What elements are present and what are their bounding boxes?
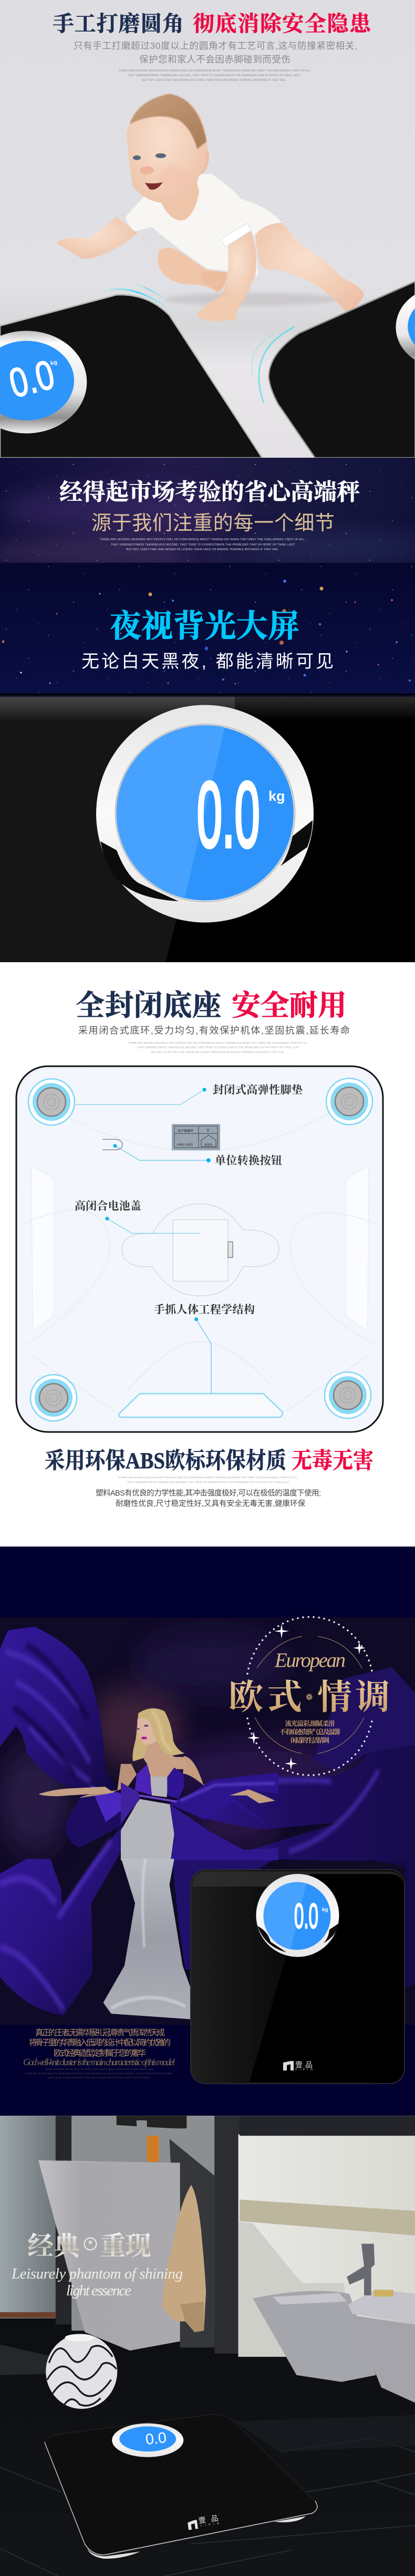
text block: English caption: BUT NOT LEAST,THEY ARE AFRAID OF LOSING THEIR FACE OR MAKING TERRIBLE MISTAKES IF THEY FAIL.	[142, 79, 286, 82]
icon: blue lcd screen	[105, 720, 295, 906]
icon: product nameplate: 电子健康秤	[178, 1129, 193, 1133]
logo: YIPIN on angled scale: 壹品	[198, 2513, 219, 2525]
icon: product nameplate: 正	[206, 1129, 210, 1132]
text block: script tagline: light essence	[66, 2282, 131, 2299]
text block: script tagline: Leisurely phantom of shining	[11, 2265, 183, 2282]
text block: noble statement: 欧式经典造型,定制属于您的奢华	[54, 2048, 146, 2058]
sub: extended arms	[79, 1764, 137, 1798]
heading: European script: European	[274, 1649, 346, 1672]
text block: noble statement: 真正的王者,无需华服礼冠,尊贵气质浑然天成	[35, 2028, 165, 2037]
sub: sparkles	[247, 1624, 366, 1770]
text block: English caption: BUT NOT LEAST,THEY ARE AFRAID OF LOSING THEIR FACE OR MAKING TERRIBLE MISTAKES IF THEY FAIL.	[126, 548, 279, 551]
text block: English caption: THEY UNDERESTIMATE THEMSELVES.SECOND, THEY TEND TO OVERESTIMATE THE PROBLEMS THAT IN FRONT OF THEM. LAST	[137, 1046, 299, 1049]
emblem: European style circle	[229, 1617, 390, 1775]
icon: rubber foot bottom right	[325, 1372, 371, 1418]
panel: rounded corner hero with baby	[0, 0, 415, 458]
decoration: coloured stars	[2, 580, 411, 684]
text block: small English caption: quality goods, to bring warm light of your life at the same time, also bring a little bit of cool romance	[48, 2077, 151, 2079]
text block: English caption: THEY UNDERESTIMATE THEMSELVES.SECOND, THEY TEND TO OVERESTIMATE THE PROBLEMS THAT IN FRONT OF THEM. LAST	[111, 543, 295, 547]
callout: sealed battery cover	[75, 1200, 201, 1233]
heading: classic reappearance: 重现	[100, 2231, 151, 2261]
callout: ergonomic grip: 手抓人体工程学结构	[154, 1303, 255, 1316]
logo: YIPIN on angled scale: YIPIN	[200, 2522, 220, 2528]
text block: ABS description	[96, 1489, 321, 1508]
callout: elastic foot pad	[76, 1084, 303, 1105]
heading: fully sealed base: 全封闭底座	[76, 990, 222, 1022]
sub: towel	[162, 2185, 206, 2332]
icon: flower ornament: ❁	[306, 1692, 313, 1702]
heading: hand polished corners	[53, 13, 370, 34]
text block: noble statement: 将骨子里的华贵融入低调的设计中,配以简约优雅的	[29, 2038, 171, 2047]
heading: fully sealed base	[76, 990, 347, 1022]
text block: polish description	[74, 40, 357, 65]
callout: sealed battery cover: 高闭合电池盖	[75, 1200, 141, 1212]
text block: small English caption: Quality devided to life and ignore the quality of life equal to ignore, adhere to the excellent quality reque	[45, 2068, 154, 2071]
text block: emblem copy: 流光溢彩,细腻柔滑	[285, 1719, 335, 1727]
heading: hand polished corners: 彻底消除安全隐患	[193, 12, 372, 36]
sub: waist satin	[121, 1782, 140, 1823]
heading: European style: 欧式	[229, 1678, 302, 1717]
sub: train behind the dress	[170, 1804, 275, 1970]
subheading: attention to detail: 源于我们注重的每一个细节	[91, 512, 335, 534]
text block: small English caption: st, such line dayplight pass strict quality inspection,Every system modulation process are manual polishing, to ensure that all products are high-	[25, 2073, 172, 2075]
text: left scale display reading: 0.0	[5, 352, 59, 406]
sub: model figure	[39, 1708, 278, 1860]
logo: YIPIN on angled scale	[187, 2513, 220, 2530]
icon: rubber foot top left	[28, 1079, 75, 1125]
sub: bidet faucet	[347, 2244, 375, 2295]
panel: European style section	[0, 1547, 415, 2116]
icon: product nameplate: 家庭用	[204, 1143, 212, 1147]
text: display reading: 0.0	[294, 1897, 318, 1936]
heading: ABS material: 无毒无害	[292, 1448, 374, 1474]
text block: English caption	[119, 69, 311, 82]
panel: night vision starfield	[0, 563, 415, 694]
text block: English caption: THERE ARE SEVERAL REASONS WHY PEOPLE FEEL NO CONFIDENCE ABOUT THEMSELVES WHEN THEY MEET THE CHALLENGES. FIRST OF ALL,	[100, 538, 305, 541]
sub: diamond dots	[247, 1617, 372, 1775]
sub: lower left satin	[0, 1826, 122, 2015]
callout: elastic foot pad: 封闭式高弹性脚垫	[213, 1084, 303, 1096]
sub: upper left satin	[0, 1626, 117, 1792]
logo: YIPIN	[283, 2060, 313, 2072]
text block: small English caption	[25, 2068, 172, 2079]
text block: ABS description: 塑料ABS有优良的力学性能,其冲击强度极好,可以在极低的温度下使用;	[96, 1489, 321, 1498]
text: large display reading: 0.0	[197, 764, 260, 867]
icon: asterisk badge	[84, 2238, 97, 2251]
sub: gown upper	[121, 1799, 174, 1860]
heading: hand polished corners: 手工打磨圆角	[53, 12, 184, 36]
icon: rubber foot top right	[326, 1078, 372, 1125]
heading: European style	[229, 1678, 390, 1717]
sub: basin faucet	[123, 2120, 147, 2160]
icon: asterisk badge: *	[88, 2238, 93, 2251]
illustration: black scale front view	[191, 1870, 404, 2084]
text block: English caption: THERE ARE SEVERAL REASONS WHY PEOPLE FEEL NO CONFIDENCE ABOUT THEMSELVES WHEN THEY MEET THE CHALLENGES. FIRST OF ALL,	[118, 1476, 298, 1479]
icon: blue lcd	[257, 1879, 331, 1952]
callout: unit switch: 单位转换按钮	[215, 1154, 282, 1167]
illustration: scale underside	[16, 1066, 383, 1432]
icon: product nameplate: 合格证 检验员	[177, 1143, 193, 1147]
illustration: woman in purple satin	[0, 1617, 415, 2025]
icon: blue impact arcs	[98, 283, 294, 403]
text block: emblem copy	[279, 1719, 340, 1744]
sub: left waist wrap	[66, 1785, 138, 1848]
sub: pedestal basin	[38, 2160, 180, 2351]
logo: YIPIN: YIPIN	[295, 2068, 313, 2072]
sub: wall bidet	[253, 2291, 376, 2382]
text block: English caption: THEY UNDERESTIMATE THEMSELVES.SECOND, THEY TEND TO OVERESTIMATE THE PROBLEMS THAT IN FRONT OF THEM. LAST	[127, 1481, 289, 1484]
icon: chrome display ring	[96, 705, 314, 923]
text: left scale display reading: kg	[50, 359, 58, 367]
panel: sealed base white section	[0, 962, 415, 1547]
text block: script tagline	[11, 2265, 183, 2299]
sub: gown lower	[103, 1859, 191, 2019]
sub: gold arcs	[255, 1636, 364, 1754]
heading: fully sealed base: 安全耐用	[232, 990, 347, 1022]
icon: rubber foot bottom left	[30, 1375, 77, 1421]
panel: market tested banner	[0, 458, 415, 565]
sub: right satin sash	[373, 1859, 415, 1988]
heading: market tested scale: 经得起市场考验的省心高端秤	[59, 479, 360, 505]
sub: hair	[132, 1708, 185, 1761]
text block: English caption	[128, 1042, 308, 1054]
icon: battery cover outline	[122, 1204, 279, 1296]
text: large display reading: kg	[268, 788, 285, 804]
illustration: left scale corner	[0, 295, 262, 458]
icon: ergonomic handle	[119, 1394, 283, 1417]
text block: polish description: 只有手工打磨超过30度以上的圆角才有工艺可言,这与防撞紧密相关,	[74, 40, 357, 51]
text block: emblem copy: 闲适的生活情调	[290, 1736, 329, 1744]
illustration: baby crawling	[57, 94, 364, 321]
text block: emblem copy: 不着痕迹贵族气息及温馨	[279, 1728, 340, 1736]
heading: night vision backlit display: 夜视背光大屏	[110, 609, 299, 644]
text block: English caption: THERE ARE SEVERAL REASONS WHY PEOPLE FEEL NO CONFIDENCE ABOUT THEMSELVES WHEN THEY MEET THE CHALLENGES. FIRST OF ALL,	[119, 69, 311, 73]
panel: classic bathroom scene	[0, 2116, 415, 2576]
sub: back walls	[0, 2116, 57, 2319]
icon: chrome ring	[256, 1874, 339, 1957]
heading: European style: 情调	[317, 1678, 390, 1717]
subheading: clear day and night: 无论白天黑夜, 都能清晰可见	[81, 652, 334, 672]
text block: sealed base description: 采用闭合式底环,受力均匀,有效保护机体,坚固抗震,延长寿命	[78, 1025, 350, 1036]
text block: ABS description: 耐磨性优良,尺寸稳定性好,又具有安全无毒无害,健康环保	[116, 1499, 306, 1508]
sub: glass wave ball	[46, 2334, 117, 2409]
illustration: right scale corner	[269, 282, 415, 458]
text: left scale display reading	[9, 360, 57, 397]
heading: ABS material: 采用环保ABS欧标环保材质	[45, 1448, 286, 1474]
sub: bodice	[150, 1776, 169, 1797]
callout: unit switch	[113, 1144, 282, 1167]
text block: English caption: THERE ARE SEVERAL REASONS WHY PEOPLE FEEL NO CONFIDENCE ABOUT THEMSELVES WHEN THEY MEET THE CHALLENGES. FIRST OF ALL,	[128, 1042, 308, 1045]
sub: floor tiles	[0, 2438, 415, 2576]
text block: English caption: THEY UNDERESTIMATE THEMSELVES.SECOND, THEY TEND TO OVERESTIMATE THE PROBLEMS THAT IN FRONT OF THEM. LAST	[128, 74, 300, 77]
sub: neck and chest	[143, 1741, 188, 1777]
text: display reading: kg	[322, 1907, 328, 1913]
icon: unit switch button	[102, 1139, 122, 1150]
text: angled scale reading: 0.0	[144, 2429, 168, 2448]
text block: script English line: God well-knit cluster is the main characteristic of this model	[23, 2057, 175, 2067]
panel: large backlit display	[0, 694, 415, 962]
text block: English caption	[100, 538, 305, 551]
text block: polish description: 保护您和家人不会因赤脚碰到而受伤	[139, 54, 290, 65]
heading: classic reappearance: 经典	[27, 2231, 84, 2261]
text block: noble statement	[29, 2028, 171, 2058]
callout: ergonomic grip	[154, 1303, 255, 1394]
text block: English caption	[118, 1476, 298, 1484]
sub: face	[137, 1718, 157, 1745]
sub: angled scale	[45, 2414, 317, 2559]
heading: classic reappearance	[27, 2231, 151, 2261]
logo: YIPIN: 壹品	[295, 2060, 313, 2069]
text block: English caption: BUT NOT LEAST,THEY ARE AFRAID OF LOSING THEIR FACE OR MAKING TERRIBLE MISTAKES IF THEY FAIL.	[151, 1051, 285, 1054]
icon: product nameplate	[172, 1124, 220, 1150]
